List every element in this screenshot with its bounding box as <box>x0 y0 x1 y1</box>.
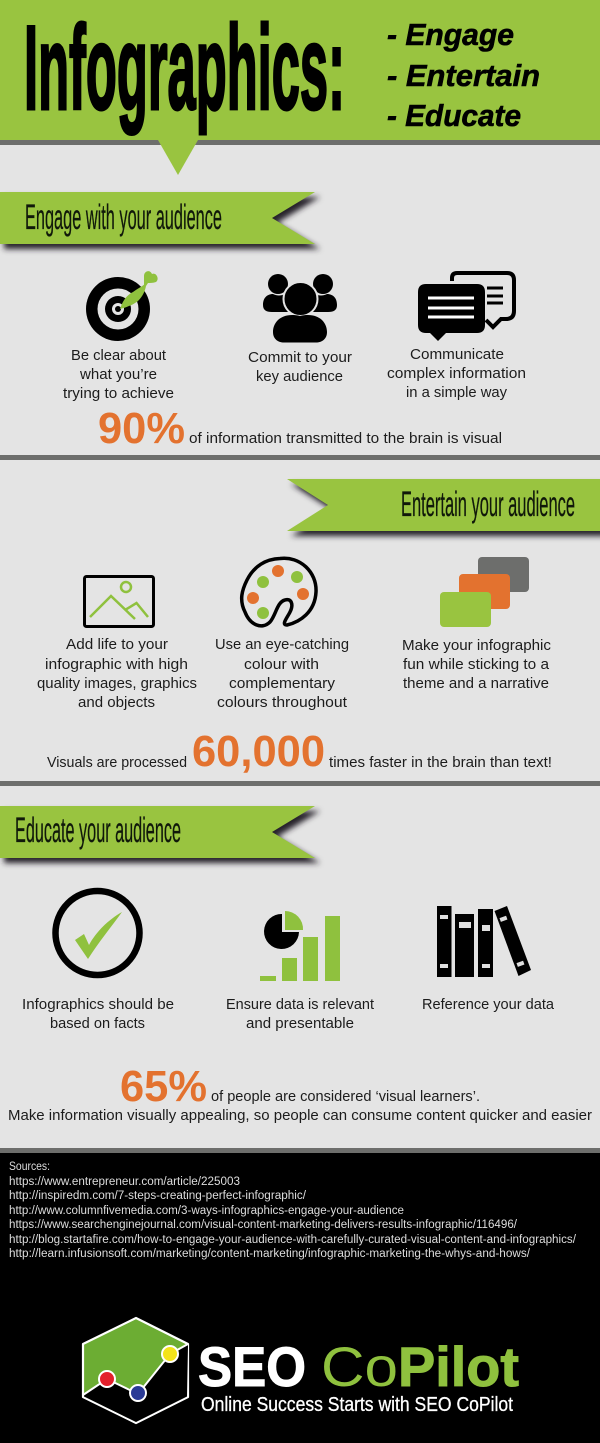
text: make fun <box>402 637 552 692</box>
stat: 90%: 90% <box>98 404 185 453</box>
text: communicate: complex information <box>387 365 526 382</box>
text: be clear <box>63 347 174 402</box>
text: communicate <box>387 346 526 401</box>
icon: data charts <box>260 911 340 981</box>
text: make fun: fun while sticking to a <box>403 656 550 673</box>
sources list: Sources: <box>9 1161 50 1173</box>
icon: audience group <box>263 274 337 342</box>
text: communicate: in a simple way <box>406 384 507 401</box>
ribbon: educate: Educate your audience <box>15 811 181 850</box>
text: add life: Add life to your <box>66 636 168 653</box>
sources list: http://www.columnfivemedia.com/3-ways-infographics-engage-your-audience <box>9 1205 404 1217</box>
logo: hexagon <box>83 1318 188 1423</box>
ribbon: entertain <box>287 479 600 536</box>
text: add life: infographic with high <box>45 656 188 673</box>
icon: speech bubbles <box>418 273 514 341</box>
sources list: http://learn.infusionsoft.com/marketing/content-marketing/infographic-marketing-the-whys-and-hows/ <box>9 1248 531 1260</box>
logo: wordmark: SEO <box>198 1335 306 1398</box>
stat: 60,000: 60,000 <box>192 727 325 776</box>
subtitle list: - Entertain <box>387 58 540 93</box>
sources list: http://inspiredm.com/7-steps-creating-perfect-infographic/ <box>9 1190 307 1202</box>
ribbon: engage <box>0 192 320 249</box>
sources list: http://blog.startafire.com/how-to-engage-your-audience-with-carefully-curated-visual-content-and-infographics/ <box>9 1234 577 1246</box>
text: make fun: theme and a narrative <box>403 675 549 692</box>
icon: check mark circle <box>56 891 140 975</box>
text: data <box>226 996 375 1032</box>
logo: tagline: Online Success Starts with SEO CoPilot <box>201 1394 513 1416</box>
logo: wordmark: Pilot <box>398 1335 519 1398</box>
stat: 65%: Make information visually appealing, so people can consume content quicker and easier <box>8 1107 592 1124</box>
text: facts: based on facts <box>50 1015 145 1032</box>
sources list: https://www.searchenginejournal.com/visual-content-marketing-delivers-results-infographic/116496/ <box>9 1219 518 1231</box>
icon: books <box>437 906 531 977</box>
text: be clear: trying to achieve <box>63 385 174 402</box>
text: make fun: Make your infographic <box>402 637 552 654</box>
stat: 60,000: Visuals are processed <box>47 754 187 771</box>
stat: 90%: of information transmitted to the brain is visual <box>189 430 502 447</box>
text: reference: Reference your data <box>422 996 555 1013</box>
text: data: and presentable <box>246 1015 354 1032</box>
text: be clear: what you’re <box>79 366 157 383</box>
ribbon: engage: Engage with your audience <box>25 198 222 237</box>
text: communicate: Communicate <box>410 346 504 363</box>
text: add life: quality images, graphics <box>37 675 197 692</box>
stat: 65%: of people are considered ‘visual learners’. <box>211 1088 480 1105</box>
sources list <box>9 1161 577 1260</box>
subtitle list: - Educate <box>387 98 521 133</box>
ribbon: educate <box>0 806 320 863</box>
sources list: https://www.entrepreneur.com/article/225003 <box>9 1176 240 1188</box>
text: eye-catching: colour with <box>244 656 319 673</box>
stat: 65% <box>8 1062 592 1124</box>
text: eye-catching: colours throughout <box>217 694 348 711</box>
logo: wordmark: Co <box>321 1335 398 1398</box>
stat: 65%: 65% <box>120 1062 207 1111</box>
icon: stacked cards <box>440 557 529 627</box>
text: data: Ensure data is relevant <box>226 996 375 1013</box>
text: commit: key audience <box>256 368 343 385</box>
text: add life: and objects <box>78 694 155 711</box>
icon: paint palette <box>242 558 316 626</box>
text: commit: Commit to your <box>248 349 352 366</box>
text: facts <box>22 996 174 1032</box>
subtitle list: - Engage <box>387 17 514 52</box>
text: eye-catching: complementary <box>229 675 336 692</box>
subtitle list <box>387 17 540 133</box>
text: commit <box>248 349 352 385</box>
text: add life <box>37 636 197 711</box>
footer panel <box>0 1148 600 1443</box>
text: eye-catching: Use an eye-catching <box>215 636 349 653</box>
stat: 60,000: times faster in the brain than text! <box>329 754 552 771</box>
stat: 90% <box>98 404 502 453</box>
stat: 60,000 <box>47 727 552 776</box>
logo: wordmark <box>198 1335 519 1398</box>
icon: target with dart <box>86 271 158 341</box>
header banner <box>0 0 600 175</box>
text: eye-catching <box>215 636 349 711</box>
text: facts: Infographics should be <box>22 996 174 1013</box>
text: be clear: Be clear about <box>71 347 167 364</box>
icon: picture frame <box>84 576 154 626</box>
